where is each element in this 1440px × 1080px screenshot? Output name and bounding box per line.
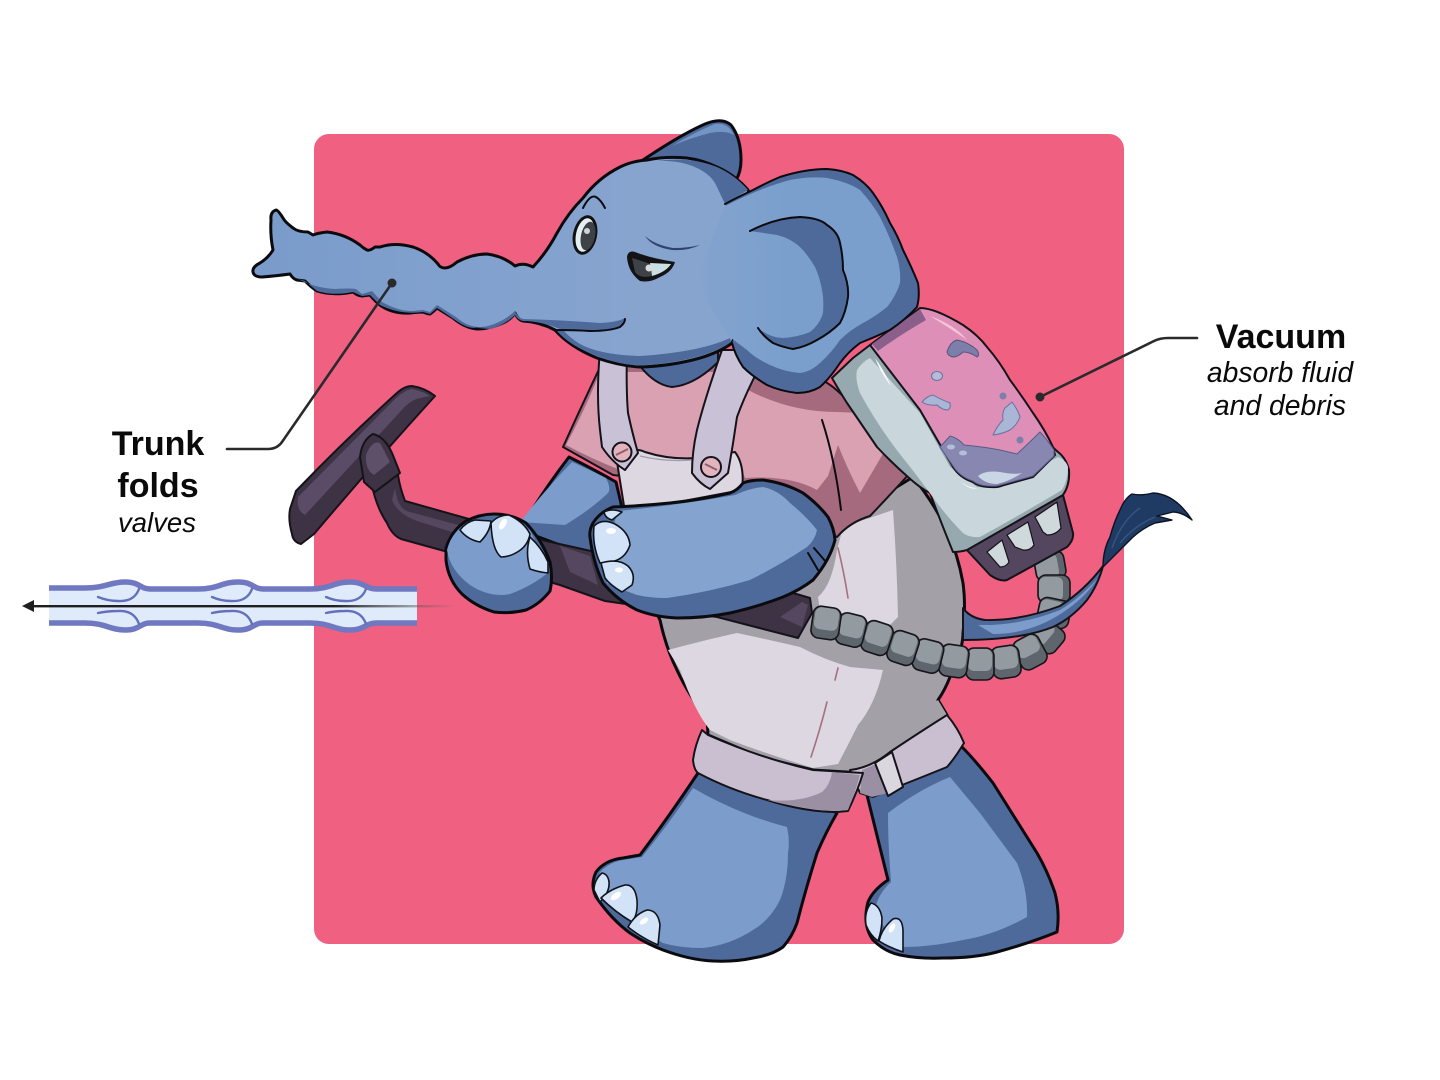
back ear xyxy=(640,121,748,200)
back cuff xyxy=(850,715,964,797)
wand nozzle bar xyxy=(289,386,435,544)
shirt xyxy=(563,350,910,537)
inner ear xyxy=(750,217,848,349)
right brow xyxy=(645,236,700,250)
jaw shadow xyxy=(557,329,731,366)
label: vacuum absorb fluid and debris: absorb fluid xyxy=(1207,356,1354,388)
label: trunk folds valves: Trunk xyxy=(112,425,204,463)
backpack base and vents xyxy=(965,495,1073,580)
label: vacuum absorb fluid and debris: and debris xyxy=(1214,389,1346,421)
left eye xyxy=(569,213,601,257)
front leg xyxy=(593,773,837,961)
backpack casing xyxy=(832,345,1069,552)
left strap xyxy=(598,350,638,470)
right eye xyxy=(627,252,675,282)
belt loop xyxy=(875,752,903,796)
wand elbow xyxy=(360,434,400,492)
back foot toenails xyxy=(866,903,903,952)
near arm xyxy=(590,480,835,618)
overalls body xyxy=(650,477,964,773)
wand pipe xyxy=(373,475,812,638)
hose xyxy=(810,550,1073,680)
label: vacuum absorb fluid and debris xyxy=(1207,318,1354,421)
near hand fingers xyxy=(594,510,633,592)
trunk underside shadow xyxy=(298,279,478,328)
far arm xyxy=(520,457,623,560)
far hand xyxy=(446,514,552,613)
tank debris xyxy=(947,340,978,357)
right strap xyxy=(692,350,758,489)
backpack xyxy=(832,308,1073,580)
left brow xyxy=(583,196,605,208)
head shadow xyxy=(657,159,748,204)
label: trunk folds valves: valves xyxy=(118,507,196,538)
head and trunk xyxy=(253,157,770,367)
vessel walls xyxy=(49,582,417,630)
tank fluid xyxy=(940,432,1054,486)
label: trunk folds valves: folds xyxy=(117,467,199,505)
label: vacuum absorb fluid and debris: Vacuum xyxy=(1216,318,1346,356)
back leg xyxy=(866,747,1058,958)
tail tuft xyxy=(1103,493,1192,567)
tail xyxy=(963,493,1192,640)
callout line: vacuum xyxy=(1036,338,1197,402)
overalls bib xyxy=(617,450,743,512)
background panel xyxy=(314,134,1124,944)
elephant illustration xyxy=(253,121,1192,961)
callout line: trunk folds xyxy=(227,278,396,449)
front cuff xyxy=(693,730,863,812)
vessel valves xyxy=(98,589,366,624)
mouth xyxy=(555,319,625,331)
lip shadow xyxy=(478,311,625,331)
front foot toenails xyxy=(594,873,660,945)
front ear xyxy=(700,169,919,393)
valve diagram xyxy=(22,582,455,630)
vacuum wand xyxy=(289,386,812,638)
backpack tank xyxy=(870,308,1055,487)
far hand fingers xyxy=(460,515,548,573)
neck xyxy=(640,350,718,387)
vessel lumen xyxy=(49,582,417,630)
label: trunk folds valves xyxy=(112,425,204,538)
flow arrow xyxy=(22,600,455,612)
